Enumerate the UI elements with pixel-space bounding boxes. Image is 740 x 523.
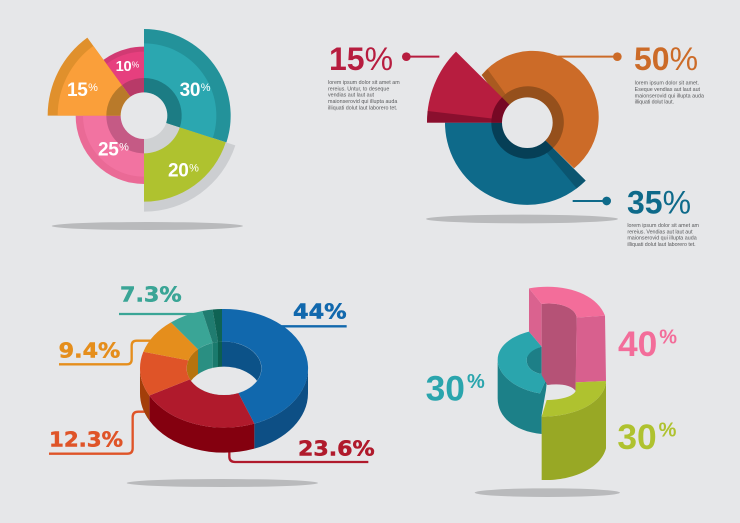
label 20%: %	[189, 163, 199, 175]
label green 30%: %	[659, 419, 677, 441]
text block 15%: lorem ipsum dolor sit amet am	[328, 80, 400, 86]
label teal 30%: 30	[426, 370, 465, 409]
segment: green 30%	[542, 381, 606, 480]
label 7.3%: 7.3%	[120, 282, 182, 306]
label pink 40%: %	[659, 326, 677, 348]
slice: orange 15%	[48, 38, 144, 116]
inner walls	[186, 342, 262, 395]
callout 50%: 50%	[634, 41, 698, 77]
label 30%: %	[201, 82, 211, 94]
label teal 30%: %	[467, 371, 485, 393]
text block 35%: rereius. Vendias aut laut aut	[627, 229, 693, 235]
chart: 3D split ring	[426, 287, 677, 497]
leader line 9.4%	[59, 341, 152, 364]
ground shadow	[52, 222, 243, 230]
label 10%: 10	[116, 59, 131, 75]
segment: darkest teal	[213, 309, 222, 342]
label pink 40%: 40	[618, 325, 657, 364]
text block 50%	[635, 81, 704, 106]
label 30%: 30	[180, 80, 200, 101]
label 15%: %	[88, 82, 98, 94]
outer side walls	[140, 368, 308, 453]
slice: pink 25%	[76, 116, 144, 184]
label 25%: 25	[98, 140, 118, 161]
ground shadow	[426, 215, 618, 223]
text block 15%: maionserovid qui illupta auda	[328, 99, 397, 105]
donut hole	[191, 367, 257, 395]
callout 35%	[573, 184, 691, 220]
text block 15%: rereius. Untur, to deseque	[328, 86, 389, 92]
text block 50%: lorem ipsum dolor sit amet.	[635, 81, 699, 87]
center hole	[121, 92, 167, 139]
label green 30%: 30	[617, 418, 657, 457]
text block 15%	[328, 80, 400, 111]
slice: green 20%	[144, 116, 226, 202]
slice: crimson 15%	[427, 52, 527, 123]
callout 15%	[329, 41, 439, 77]
infographic canvas	[48, 29, 704, 497]
segment: teal 30%	[498, 332, 547, 434]
text block 35%: illiquati dolut laut laborero tet.	[627, 242, 696, 248]
leader line 44%	[282, 323, 347, 330]
text block 35%: lorem ipsum dolor sit amet am	[627, 223, 700, 229]
callout 35%: 35%	[627, 184, 691, 220]
text block 50%: maionserovid qui illupta auda	[635, 93, 704, 99]
segment: teal 7.3%	[171, 311, 213, 349]
label 23.6%: 23.6%	[298, 437, 375, 461]
label 44%: 44%	[293, 299, 347, 323]
text block 15%: illiquati dolut laut laborero tet.	[328, 105, 397, 111]
chart: donut with callouts	[328, 41, 704, 248]
callout 50%	[557, 41, 698, 77]
segment: dark teal	[202, 310, 218, 343]
callout 15%: 15%	[329, 41, 393, 77]
label 9.4%: 9.4%	[59, 338, 121, 362]
slice: teal 30%	[144, 29, 231, 142]
segment: pink 40%	[529, 287, 606, 391]
text block 50%: Eseque vendias aut laut aut	[635, 87, 701, 93]
leader line 7.3%	[119, 310, 203, 317]
label 25%: %	[119, 142, 129, 154]
segment: blue 44%	[222, 309, 308, 424]
slice: blue 35%	[445, 123, 586, 205]
chart: exploded radial pie	[48, 29, 243, 230]
segment: yellow 9.4%	[143, 322, 198, 360]
center hole	[502, 97, 553, 148]
leader line 12.3%	[49, 412, 147, 454]
text block 35%: maionserovid qui illupta auda	[627, 236, 697, 242]
text block 50%: illiquati dolut laut.	[635, 100, 674, 106]
label 12.3%: 12.3%	[49, 428, 123, 452]
chart: 3D donut	[49, 282, 375, 487]
label 15%: 15	[67, 80, 87, 101]
text block 35%	[627, 223, 700, 248]
slice: magenta 10%	[103, 47, 144, 116]
text block 15%: vendias aut laut aut	[328, 93, 375, 99]
gray offset shadow of green slice	[144, 116, 235, 212]
slice: orange 50%	[482, 51, 599, 168]
label 10%: %	[132, 59, 140, 69]
segment: red 23.6%	[149, 379, 254, 428]
leader line 23.6%	[229, 450, 368, 462]
ground shadow	[127, 479, 318, 487]
segment: orange 12.3%	[140, 352, 190, 395]
ground shadow	[475, 488, 620, 497]
label 20%: 20	[168, 161, 188, 182]
